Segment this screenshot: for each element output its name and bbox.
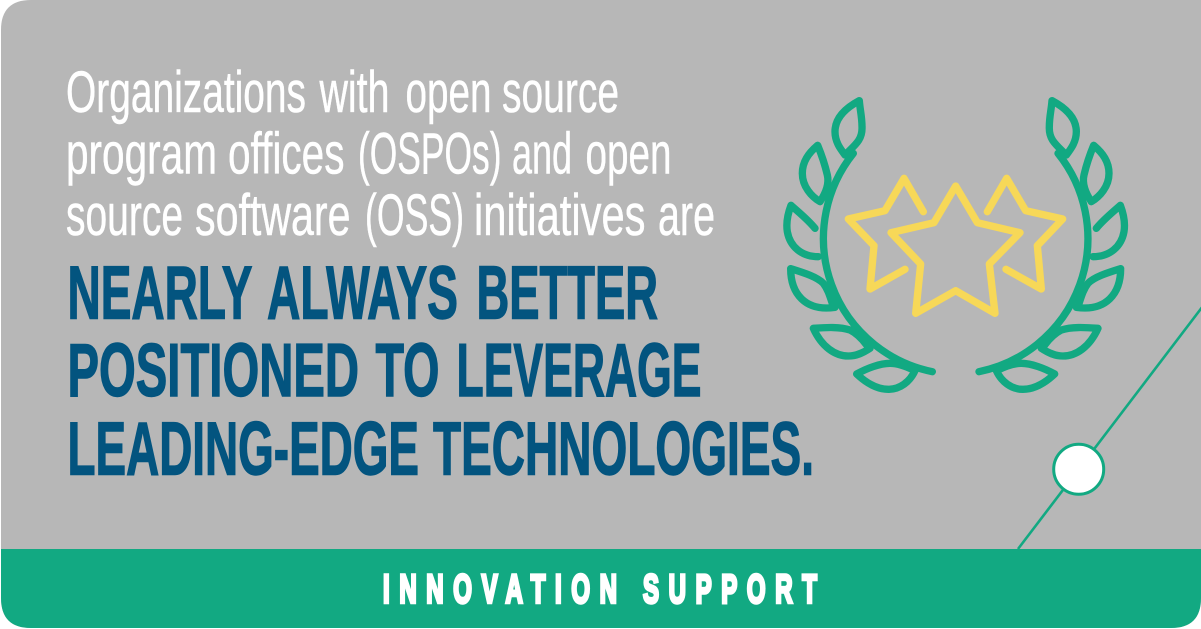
laurel left branch [787, 101, 932, 389]
intro line 1: open [406, 60, 492, 125]
intro line 3: are [658, 183, 715, 248]
headline line 2: POSITIONED [68, 328, 359, 412]
intro line 3 [66, 183, 715, 248]
footer band [1, 549, 1201, 628]
intro line 2 [66, 122, 672, 186]
node circle on connector [1054, 444, 1104, 494]
headline line 3: TECHNOLOGIES. [433, 406, 814, 490]
intro line 3: source [66, 183, 183, 248]
intro line 2: (OSPOs) [358, 122, 502, 186]
headline line 3: LEADING-EDGE [68, 406, 419, 490]
diagonal connector line [1018, 306, 1201, 549]
intro line 2: and [512, 122, 572, 186]
headline line 1: BETTER [476, 250, 658, 334]
center star [891, 186, 1020, 313]
intro line 2: program [66, 122, 217, 186]
headline text block [68, 250, 814, 490]
intro text block [66, 60, 715, 248]
intro line 1: with [319, 60, 390, 125]
headline line 1 [68, 250, 658, 334]
icon: laurel wreath with stars [787, 101, 1125, 389]
headline line 2: LEVERAGE [456, 328, 702, 412]
intro line 2: open [586, 122, 672, 186]
intro line 2: offices [228, 122, 344, 186]
footer label: INNOVATION SUPPORT [383, 566, 827, 611]
intro line 1 [66, 60, 619, 125]
intro line 3: (OSS) [365, 183, 464, 248]
headline line 1: ALWAYS [267, 250, 458, 334]
intro line 1: Organizations [66, 60, 306, 125]
laurel right branch [979, 101, 1125, 389]
headline line 2: TO [376, 328, 440, 412]
left star [848, 178, 923, 289]
intro line 3: software [195, 183, 350, 248]
right star [987, 178, 1063, 289]
headline line 1: NEARLY [68, 250, 252, 334]
intro line 3: initiatives [474, 183, 646, 248]
intro line 1: source [502, 60, 619, 125]
